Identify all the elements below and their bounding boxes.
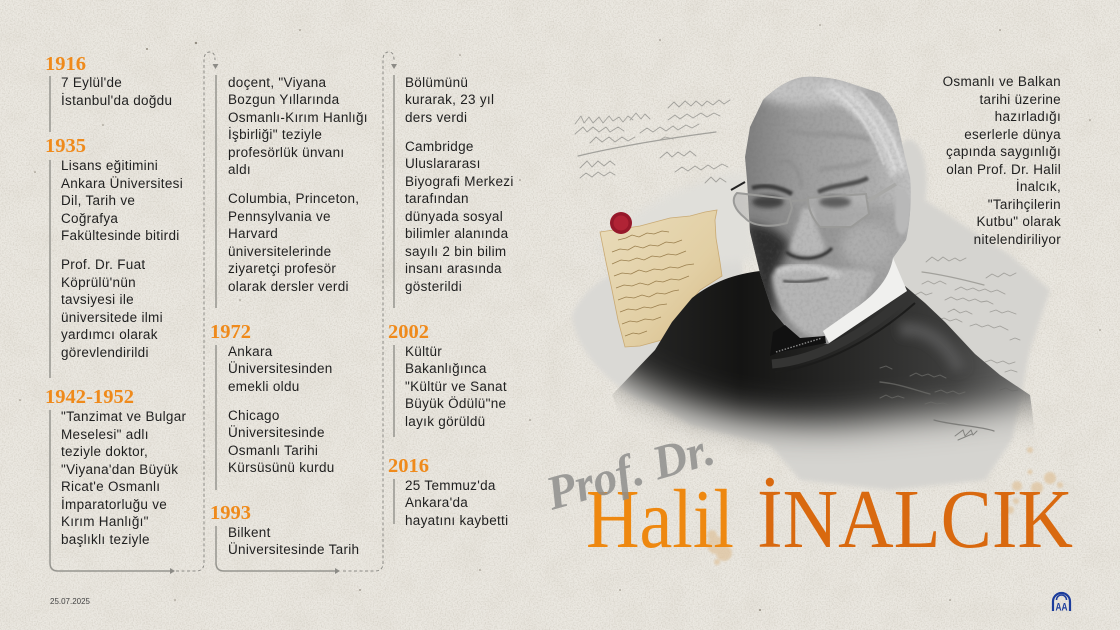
- handwriting over sweater: [880, 366, 994, 440]
- portrait: ear: [894, 201, 910, 234]
- intro text: Osmanlı ve Balkan: [943, 74, 1061, 89]
- text 2002: layık görüldü: [405, 414, 485, 429]
- text 1942-1952: İmparatorluğu ve: [61, 497, 167, 512]
- text 1993: [228, 525, 359, 557]
- text continuation: Bölümünü: [405, 75, 468, 90]
- paint splatter: [707, 447, 1063, 565]
- intro text: olan Prof. Dr. Halil: [946, 162, 1061, 177]
- text 1993: Üniversitesinde Tarih: [228, 542, 359, 557]
- portrait: hair: [815, 82, 908, 178]
- portrait of Halil İnalcık: [612, 70, 1040, 470]
- text 1942-1952: teziyle doktor,: [61, 444, 148, 459]
- text 1935: yardımcı olarak: [61, 327, 158, 342]
- text 1972: [228, 344, 335, 475]
- intro text: Kutbu" olarak: [976, 214, 1061, 229]
- text 2002: "Kültür ve Sanat: [405, 379, 507, 394]
- date: 25.07.2025: [50, 596, 90, 606]
- text 1935: Köprülü'nün: [61, 275, 136, 290]
- text 2016: 25 Temmuz'da: [405, 478, 496, 493]
- portrait: head and face: [745, 76, 911, 344]
- text 1935: Fakültesinde bitirdi: [61, 228, 180, 243]
- text continuation: [228, 75, 368, 294]
- handwriting: lower right: [915, 257, 1020, 391]
- text 1935: Coğrafya: [61, 211, 118, 226]
- year 1942-1952: 1942-1952: [45, 386, 134, 408]
- portrait: nose: [790, 208, 825, 256]
- text continuation: gösterildi: [405, 279, 462, 294]
- text 1916: [61, 75, 172, 108]
- text continuation: tarafından: [405, 191, 469, 206]
- text continuation: İşbirliği" teziyle: [228, 127, 322, 142]
- text 1935: görevlendirildi: [61, 345, 149, 360]
- portrait: right cheek: [842, 223, 894, 267]
- text 1942-1952: Meselesi" adlı: [61, 427, 149, 442]
- text continuation: [405, 75, 514, 294]
- text continuation: doçent, "Viyana: [228, 75, 327, 90]
- text 1972: Üniversitesinden: [228, 361, 333, 376]
- text continuation: Osmanlı-Kırım Hanlığı: [228, 110, 368, 125]
- text continuation: profesörlük ünvanı: [228, 145, 344, 160]
- text 2016: hayatını kaybetti: [405, 513, 508, 528]
- portrait: glasses: [731, 182, 896, 227]
- text 1972: Kürsüsünü kurdu: [228, 460, 335, 475]
- handwriting: upper left: [575, 100, 730, 183]
- text 1972: emekli oldu: [228, 379, 300, 394]
- text continuation: Cambridge: [405, 139, 474, 154]
- timeline column 1: [45, 53, 186, 547]
- text continuation: Uluslararası: [405, 156, 481, 171]
- text continuation: Biyografi Merkezi: [405, 174, 514, 189]
- text continuation: insanı arasında: [405, 261, 502, 276]
- text 1993: Bilkent: [228, 525, 271, 540]
- text 2002: Büyük Ödülü"ne: [405, 396, 506, 411]
- icon: AA logo: AA: [1056, 602, 1068, 614]
- text 2002: Bakanlığınca: [405, 361, 487, 376]
- text 1972: Ankara: [228, 344, 273, 359]
- text continuation: sayılı 2 bin bilim: [405, 244, 506, 259]
- text 1935: tavsiyesi ile: [61, 292, 134, 307]
- portrait: lower face tone: [788, 204, 908, 344]
- text 2002: Kültür: [405, 344, 442, 359]
- portrait: forehead wrinkles: [800, 132, 870, 180]
- text 1972: Osmanlı Tarihi: [228, 443, 318, 458]
- aged note paper with red wax seal: [600, 210, 722, 347]
- text continuation: kurarak, 23 yıl: [405, 92, 494, 107]
- subtitle: Prof. Dr.: Prof. Dr.: [539, 422, 720, 521]
- text 1935: Prof. Dr. Fuat: [61, 257, 145, 272]
- portrait: tie: [770, 325, 826, 356]
- portrait: eye sockets: [752, 196, 784, 208]
- watercolor wash behind portrait: [572, 140, 1050, 490]
- text 1942-1952: başlıklı teziyle: [61, 532, 150, 547]
- year 1993: 1993: [210, 502, 251, 524]
- timeline column 3: [388, 75, 514, 528]
- intro text: tarihi üzerine: [980, 92, 1061, 107]
- text continuation: ziyaretçi profesör: [228, 261, 336, 276]
- text 1935: Ankara Üniversitesi: [61, 176, 183, 191]
- text 1942-1952: "Viyana'dan Büyük: [61, 462, 178, 477]
- portrait: shaded left cheek: [745, 222, 790, 320]
- year 1916: 1916: [45, 53, 86, 75]
- text 1972: Chicago: [228, 408, 280, 423]
- intro text: "Tarihçilerin: [988, 197, 1061, 212]
- text continuation: olarak dersler verdi: [228, 279, 349, 294]
- year 1935: 1935: [45, 135, 86, 157]
- portrait: top of head light: [755, 74, 865, 106]
- intro text: eserlerle dünya: [964, 127, 1061, 142]
- text 2016: [405, 478, 508, 528]
- text 2002: [405, 344, 507, 429]
- text continuation: dünyada sosyal: [405, 209, 503, 224]
- icon: AA logo: [1053, 593, 1070, 614]
- text continuation: Bozgun Yıllarında: [228, 92, 340, 107]
- title: Halil İNALCIK: [586, 473, 1073, 566]
- text 1935: [61, 158, 183, 360]
- text 1935: Lisans eğitimini: [61, 158, 158, 173]
- text continuation: Pennsylvania ve: [228, 209, 331, 224]
- portrait: white collar: [823, 258, 907, 343]
- text continuation: ders verdi: [405, 110, 467, 125]
- text 2016: Ankara'da: [405, 495, 468, 510]
- text 1942-1952: [61, 409, 186, 547]
- title: Halil İNALCIK: İNALCIK: [757, 473, 1073, 566]
- timeline column 2: [210, 75, 368, 557]
- intro text: İnalcık,: [1016, 179, 1061, 194]
- text 1942-1952: "Tanzimat ve Bulgar: [61, 409, 186, 424]
- text continuation: bilimler alanında: [405, 226, 509, 241]
- text continuation: üniversitelerinde: [228, 244, 331, 259]
- text continuation: Harvard: [228, 226, 278, 241]
- text continuation: aldı: [228, 162, 251, 177]
- text 1935: Dil, Tarih ve: [61, 193, 135, 208]
- text continuation: Columbia, Princeton,: [228, 191, 359, 206]
- text 1916: İstanbul'da doğdu: [61, 93, 172, 108]
- title: Halil İNALCIK: Halil: [586, 473, 734, 566]
- text 1916: 7 Eylül'de: [61, 75, 122, 90]
- text 1942-1952: Kırım Hanlığı": [61, 514, 149, 529]
- intro text: [943, 74, 1061, 247]
- text 1942-1952: Ricat'e Osmanlı: [61, 479, 160, 494]
- year 1972: 1972: [210, 321, 251, 343]
- timeline connectors: [50, 52, 397, 574]
- portrait: beard: [772, 264, 876, 338]
- text 1935: üniversitede ilmi: [61, 310, 163, 325]
- intro text: çapında saygınlığı: [946, 144, 1061, 159]
- text 1972: Üniversitesinde: [228, 425, 325, 440]
- year 2002: 2002: [388, 321, 429, 343]
- portrait: brows: [752, 186, 792, 194]
- portrait: shoulders and sweater fading out: [612, 271, 1034, 452]
- year 2016: 2016: [388, 455, 429, 477]
- intro text: nitelendiriliyor: [974, 232, 1061, 247]
- portrait: skin texture: [770, 79, 910, 332]
- intro text: hazırladığı: [995, 109, 1061, 124]
